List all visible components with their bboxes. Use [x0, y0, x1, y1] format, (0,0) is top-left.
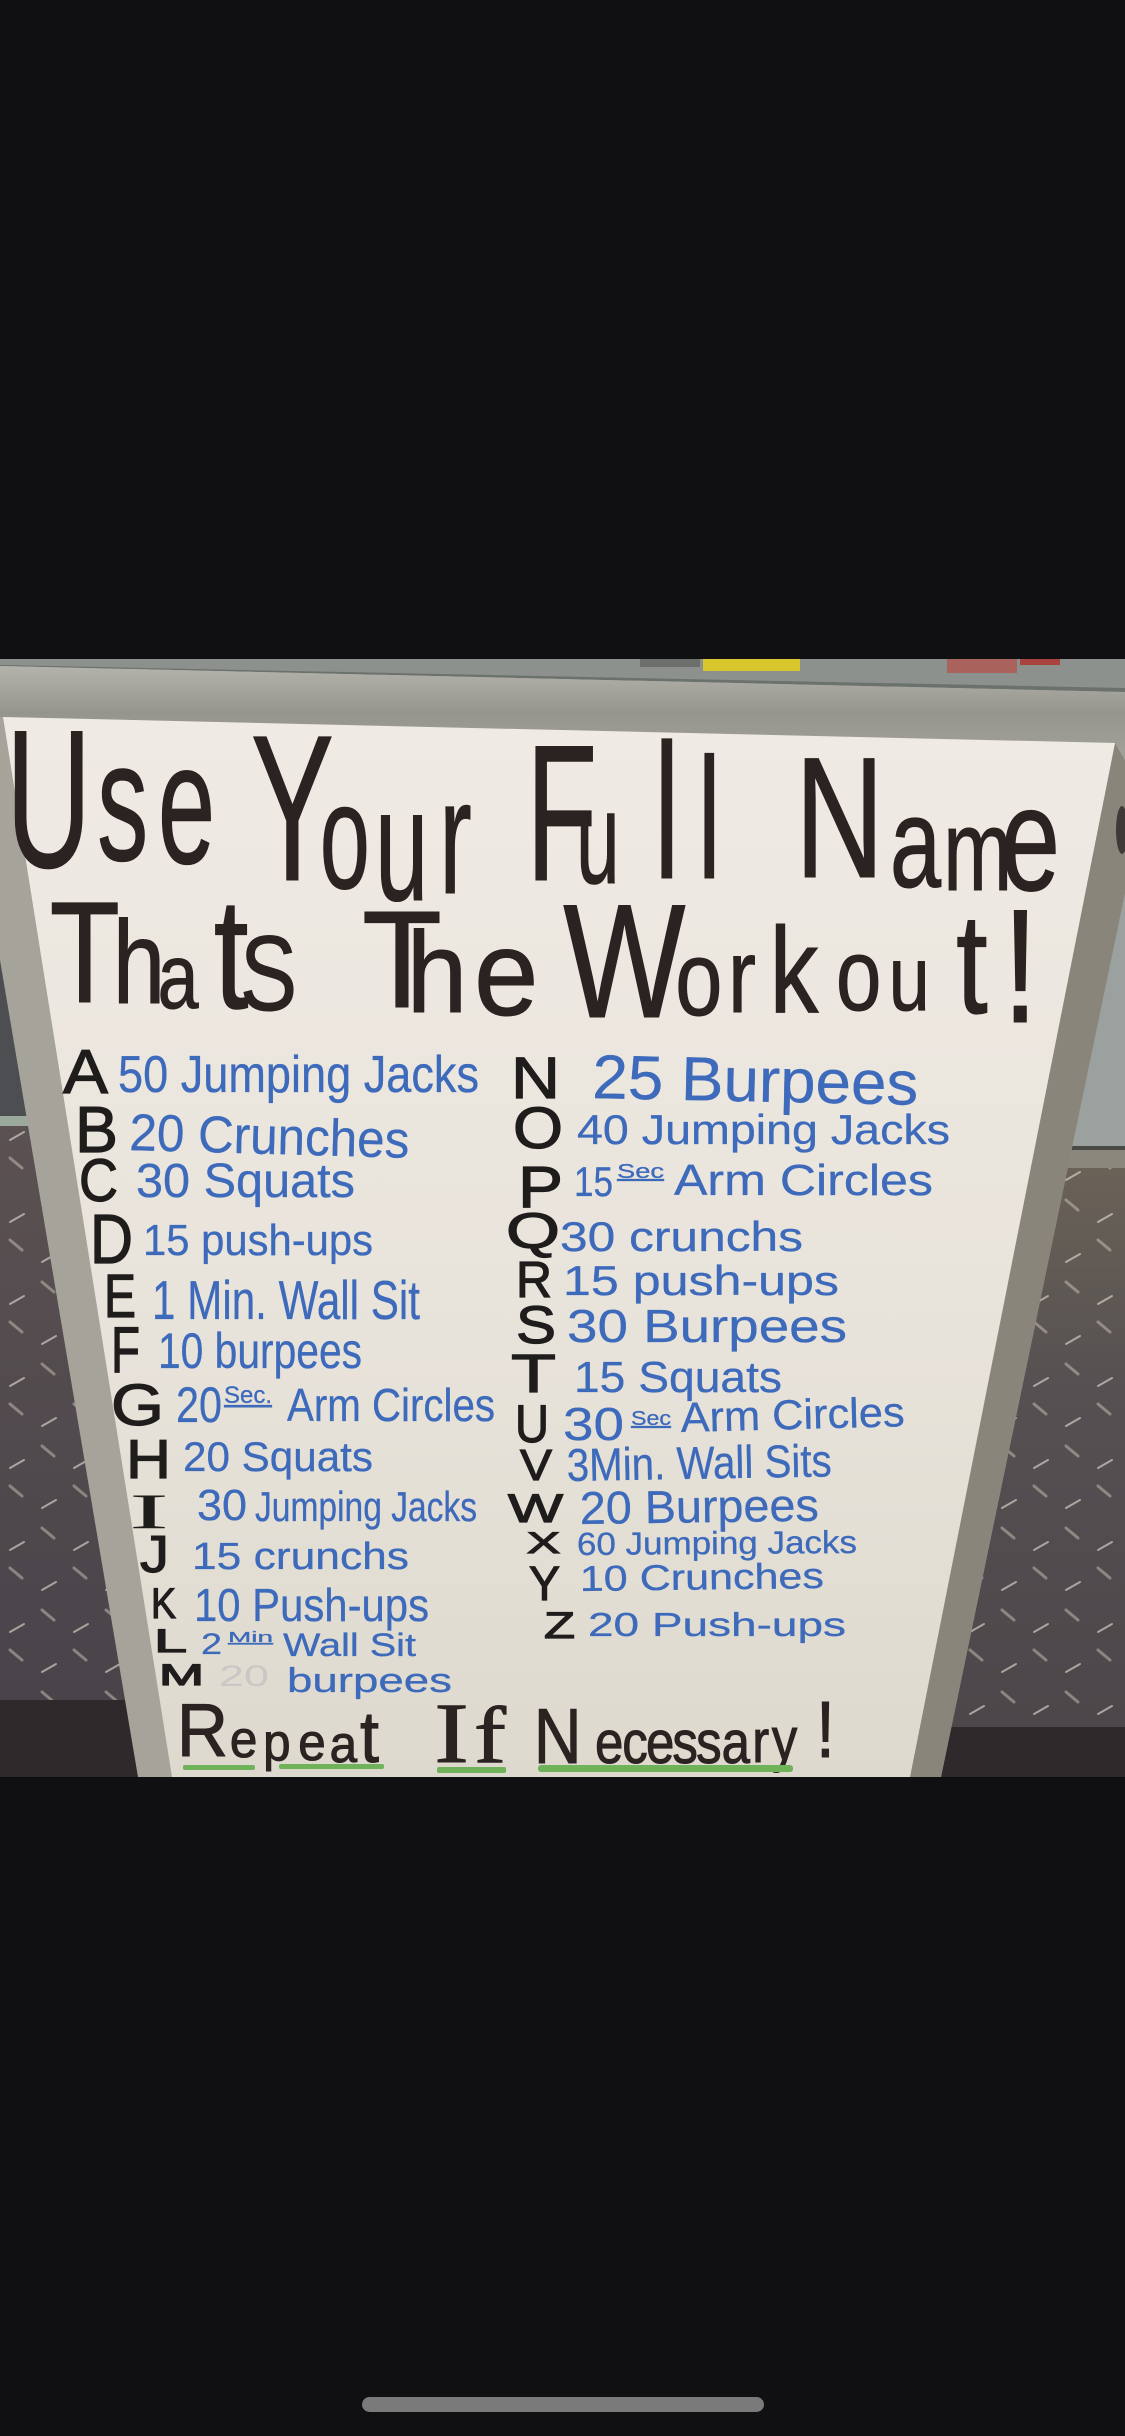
S: S — [516, 1296, 556, 1355]
title line 1: N — [795, 721, 884, 914]
G: Arm Circles — [287, 1379, 495, 1431]
P: P — [518, 1155, 563, 1220]
U: Sec — [631, 1408, 671, 1430]
B: B — [75, 1093, 118, 1166]
Y — [529, 1555, 824, 1611]
L: Min — [228, 1629, 273, 1646]
title line 2: t — [956, 885, 988, 1044]
workout list: letters N to Z — [506, 1043, 950, 1646]
P: 15 — [574, 1158, 613, 1205]
top ledge with tape — [0, 659, 1125, 692]
X: 60 Jumping Jacks — [577, 1524, 857, 1562]
I — [129, 1481, 477, 1539]
N: N — [511, 1046, 560, 1111]
P: Sec — [617, 1161, 664, 1183]
title line 2: r — [728, 918, 756, 1035]
G: 20 — [176, 1377, 222, 1433]
footer: Repeat If Necessary!: e — [646, 1709, 674, 1776]
J: J — [140, 1526, 169, 1584]
footer: Repeat If Necessary!: I — [434, 1685, 469, 1781]
I: I — [129, 1483, 169, 1539]
U: 30 — [563, 1398, 624, 1450]
whiteboard frame — [0, 666, 1125, 1777]
M — [159, 1659, 452, 1700]
L: L — [154, 1623, 187, 1659]
P — [518, 1155, 933, 1220]
W: W — [508, 1487, 563, 1531]
U: Arm Circles — [680, 1388, 905, 1441]
title line 1: F — [526, 704, 597, 921]
A — [63, 1038, 479, 1107]
title line 1: u — [576, 764, 620, 911]
title line 2: T — [362, 882, 442, 1037]
title line 2: e — [474, 905, 539, 1042]
footer: Repeat If Necessary!: t — [360, 1696, 379, 1777]
R: R — [516, 1251, 552, 1308]
title line 2: S — [240, 913, 297, 1033]
title line 2 — [50, 866, 1038, 1057]
panel: whiteboard — [3, 690, 1115, 1781]
footer: Repeat If Necessary!: e — [298, 1713, 326, 1771]
footer: Repeat If Necessary!: s — [696, 1709, 722, 1776]
title line 2: h — [113, 896, 165, 1028]
U: U — [515, 1395, 549, 1454]
J — [140, 1526, 409, 1584]
T: 15 Squats — [574, 1353, 782, 1402]
L: Wall Sit — [283, 1627, 416, 1663]
title line 1 — [6, 690, 1060, 934]
N: 25 Burpees — [592, 1043, 919, 1119]
title line 2: o — [836, 917, 881, 1032]
H: 20 Squats — [183, 1433, 373, 1480]
home indicator bar — [362, 2397, 764, 2412]
footer: Repeat If Necessary!: R — [177, 1689, 228, 1772]
U — [515, 1388, 905, 1454]
workout list: letters A to M — [63, 1038, 495, 1700]
H: H — [126, 1428, 171, 1490]
title line 2: a — [158, 925, 199, 1028]
F: F — [111, 1313, 140, 1386]
G: Sec. — [224, 1382, 272, 1409]
title line 2: u — [889, 927, 930, 1030]
B — [75, 1093, 410, 1170]
C: 30 Squats — [136, 1155, 355, 1208]
title line 2: t — [214, 866, 249, 1042]
Y: Y — [529, 1558, 560, 1611]
title line 2: ! — [1002, 876, 1038, 1057]
G — [111, 1373, 495, 1438]
P: Arm Circles — [674, 1156, 933, 1205]
M: M — [159, 1659, 204, 1692]
footer: Repeat If Necessary!: s — [672, 1709, 698, 1776]
title line 1: e — [1001, 757, 1060, 922]
J: 15 crunchs — [192, 1536, 409, 1578]
G: G — [111, 1373, 164, 1438]
title line 1: o — [320, 753, 370, 921]
K: 10 Push-ups — [194, 1579, 429, 1631]
title line 1: Y — [251, 693, 334, 925]
title line 2: o — [675, 920, 722, 1038]
V: V — [520, 1441, 553, 1490]
footer: Repeat If Necessary!: e — [595, 1709, 623, 1776]
footer: Repeat If Necessary!: f — [474, 1691, 507, 1780]
A: 50 Jumping Jacks — [118, 1046, 479, 1104]
V: 3Min. Wall Sits — [566, 1434, 832, 1491]
title line 1: e — [158, 709, 215, 901]
C — [79, 1147, 355, 1214]
Y: 10 Crunches — [580, 1555, 824, 1599]
S: 30 Burpees — [567, 1300, 847, 1352]
W: 20 Burpees — [579, 1479, 819, 1534]
Z: Z — [544, 1605, 575, 1646]
I: 30 — [197, 1481, 247, 1530]
footer: Repeat If Necessary!: c — [622, 1709, 648, 1776]
title line 1: s — [97, 706, 148, 896]
E — [104, 1262, 420, 1331]
L — [154, 1623, 416, 1663]
T — [511, 1344, 782, 1404]
footer: Repeat If Necessary!: a — [722, 1709, 750, 1776]
I: Jumping Jacks — [255, 1483, 477, 1530]
D: 15 push-ups — [143, 1216, 373, 1265]
D — [90, 1200, 373, 1278]
K: K — [151, 1580, 176, 1628]
O: 40 Jumping Jacks — [577, 1106, 950, 1153]
M: burpees — [287, 1662, 452, 1700]
X: X — [527, 1527, 560, 1560]
footer: Repeat If Necessary!: y — [772, 1706, 797, 1773]
Q: Q — [506, 1203, 560, 1259]
B: 20 Crunches — [129, 1104, 410, 1170]
footer: Repeat If Necessary!: e — [230, 1710, 257, 1768]
title line 2: W — [563, 871, 686, 1052]
E: 1 Min. Wall Sit — [152, 1269, 420, 1331]
title line 1: u — [375, 756, 428, 934]
board surface — [3, 717, 1115, 1777]
L: 2 — [201, 1628, 222, 1661]
Z: 20 Push-ups — [588, 1606, 846, 1643]
title line 2: k — [770, 903, 819, 1039]
footer: Repeat If Necessary!: r — [752, 1708, 769, 1775]
title line 1: m — [943, 787, 1012, 915]
Z — [544, 1605, 846, 1646]
title line 1: r — [439, 746, 472, 928]
F — [111, 1313, 362, 1386]
O — [513, 1096, 950, 1161]
title line 1: l — [654, 705, 680, 919]
F: 10 burpees — [158, 1323, 362, 1379]
R: 15 push-ups — [563, 1257, 839, 1304]
E: E — [104, 1262, 136, 1330]
Q — [506, 1203, 803, 1260]
footer: Repeat If Necessary!: p — [263, 1713, 291, 1771]
footer: Repeat If Necessary!: N — [534, 1693, 582, 1780]
title line 1: l — [698, 724, 721, 916]
footer: Repeat If Necessary! — [177, 1685, 835, 1781]
title line 1: a — [890, 771, 942, 915]
M: 20 — [219, 1660, 269, 1693]
title line 1: U — [6, 690, 91, 909]
title line 2: T — [50, 872, 120, 1033]
H — [126, 1428, 373, 1490]
R — [516, 1251, 839, 1308]
A: A — [63, 1038, 109, 1107]
photo background: gym wall and floor — [0, 659, 1125, 1777]
S — [516, 1296, 847, 1355]
O: O — [513, 1096, 563, 1161]
footer: Repeat If Necessary!: ! — [816, 1685, 835, 1774]
Q: 30 crunchs — [560, 1213, 803, 1260]
D: D — [90, 1200, 133, 1278]
T: T — [511, 1344, 556, 1404]
C: C — [79, 1147, 118, 1214]
title line 2: h — [407, 907, 467, 1037]
footer: Repeat If Necessary!: a — [330, 1715, 358, 1773]
